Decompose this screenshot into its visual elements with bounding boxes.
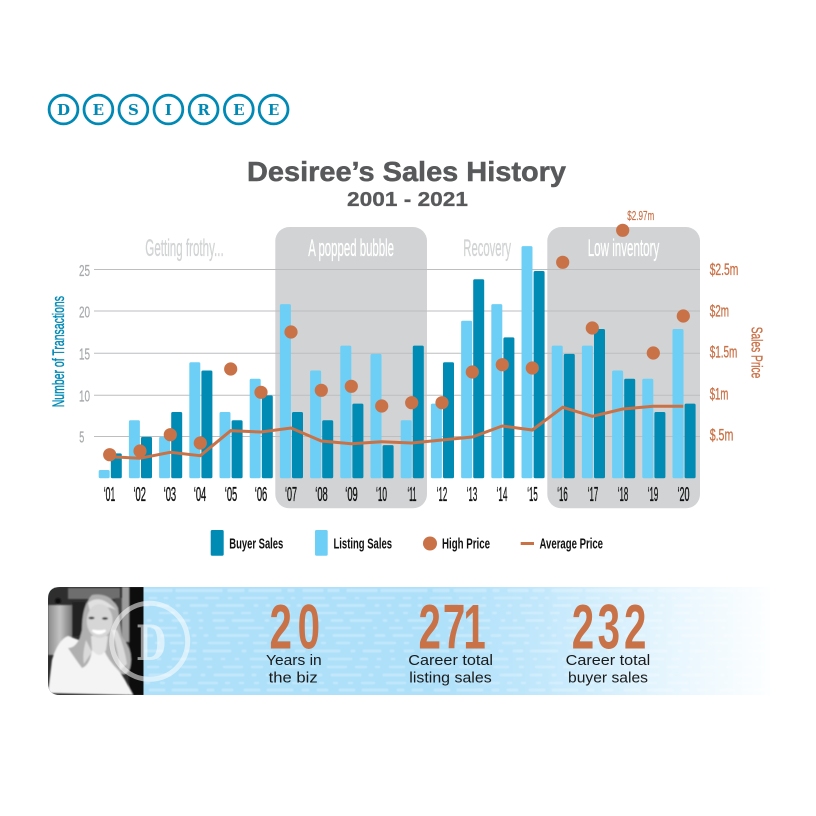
stat: career total listing sales: listing sales [409, 670, 492, 686]
chart: sales history: ‘20 [678, 484, 690, 506]
panel: low inventory [547, 227, 700, 508]
stat: career total buyer sales: 232 [572, 592, 646, 663]
year labels: ‘14 [496, 484, 508, 506]
legend: buyer sales [211, 530, 283, 556]
right axis labels: $2m [710, 302, 729, 321]
right axis title: Sales Price [748, 327, 764, 378]
left axis labels: 20 [79, 304, 90, 322]
left axis labels: 5 [79, 430, 84, 446]
right axis labels: $1m [710, 384, 728, 403]
subtitle: year range: 2001 - 2021 [347, 188, 468, 211]
stat: career total listing sales: Career total [408, 652, 493, 669]
year labels: ‘13 [467, 484, 477, 506]
listing sales bars [99, 246, 683, 478]
logo: Desiree circled letters: R [197, 101, 210, 119]
year labels: ‘05 [225, 484, 237, 506]
legend: high price: High Price [442, 536, 490, 552]
year labels: ‘17 [588, 484, 598, 506]
year labels: ‘19 [648, 484, 658, 506]
stat: career total buyer sales [566, 592, 650, 686]
stat: career total listing sales [408, 592, 493, 686]
legend [211, 530, 603, 556]
callout: peak high price: $2.97m [627, 209, 654, 223]
logo watermark: circled D [112, 603, 188, 679]
year labels: ‘15 [527, 484, 538, 506]
year labels: ‘03 [164, 484, 176, 506]
high price dots [103, 224, 690, 461]
buyer sales bars [111, 271, 696, 478]
logo: Desiree circled letters: E [268, 101, 279, 119]
logo watermark: circled D: D [136, 614, 166, 672]
legend: average price [521, 536, 603, 552]
right axis labels: $.5m [710, 426, 733, 445]
stat: career total listing sales: 271 [419, 592, 486, 663]
title: Desiree’s Sales History [247, 156, 566, 187]
chart: sales history: Low inventory [588, 235, 659, 262]
stat: years in the biz [266, 592, 322, 686]
year labels [104, 484, 690, 506]
legend: average price: Average Price [540, 536, 603, 552]
stat: career total buyer sales: Career total [566, 652, 650, 669]
year labels: ‘04 [194, 484, 206, 506]
logo: Desiree circled letters: S [128, 101, 139, 119]
logo: Desiree circled letters: E [93, 101, 104, 119]
logo: Desiree circled letters: D [57, 101, 70, 119]
photo: portrait of Desiree [48, 587, 144, 695]
year labels: ‘10 [376, 484, 387, 506]
legend: listing sales [315, 530, 392, 556]
chart: sales history: Recovery [463, 235, 511, 262]
stat: career total buyer sales: buyer sales [568, 670, 648, 686]
right axis labels: $1.5m [710, 343, 737, 362]
left axis labels [79, 263, 90, 446]
year labels: ‘06 [255, 484, 267, 506]
year labels: ‘07 [285, 484, 297, 506]
chart: sales history [49, 209, 764, 508]
logo: Desiree circled letters: I [165, 101, 172, 119]
average price line [110, 406, 683, 458]
stat: years in the biz: the biz [269, 670, 318, 686]
legend: buyer sales: Buyer Sales [229, 536, 283, 552]
year labels: ‘02 [133, 484, 146, 506]
year labels: ‘08 [315, 484, 328, 506]
stat: years in the biz: Years in [266, 652, 322, 669]
year labels: ‘11 [408, 484, 416, 506]
year labels: ‘09 [345, 484, 358, 506]
right axis labels: $2.5m [710, 260, 738, 279]
chart: sales history: Getting frothy... [145, 235, 224, 262]
year labels: ‘18 [618, 484, 628, 506]
left axis labels: 15 [79, 346, 90, 364]
chart: sales history: A popped bubble [308, 235, 394, 262]
panel: a popped bubble [275, 227, 427, 508]
right axis labels [710, 260, 738, 445]
year labels: ‘16 [557, 484, 568, 506]
year labels: ‘01 [104, 484, 115, 506]
left axis labels: 25 [79, 263, 90, 280]
stat: years in the biz: 20 [269, 592, 320, 663]
legend: high price [423, 536, 490, 552]
left axis title: Number of Transactions [49, 296, 68, 407]
panel: career stats banner [48, 587, 770, 695]
legend: listing sales: Listing Sales [334, 536, 392, 552]
left axis labels: 10 [79, 388, 90, 406]
logo: Desiree circled letters [49, 95, 288, 124]
year labels: ‘12 [437, 484, 447, 506]
logo: Desiree circled letters: E [233, 101, 245, 119]
